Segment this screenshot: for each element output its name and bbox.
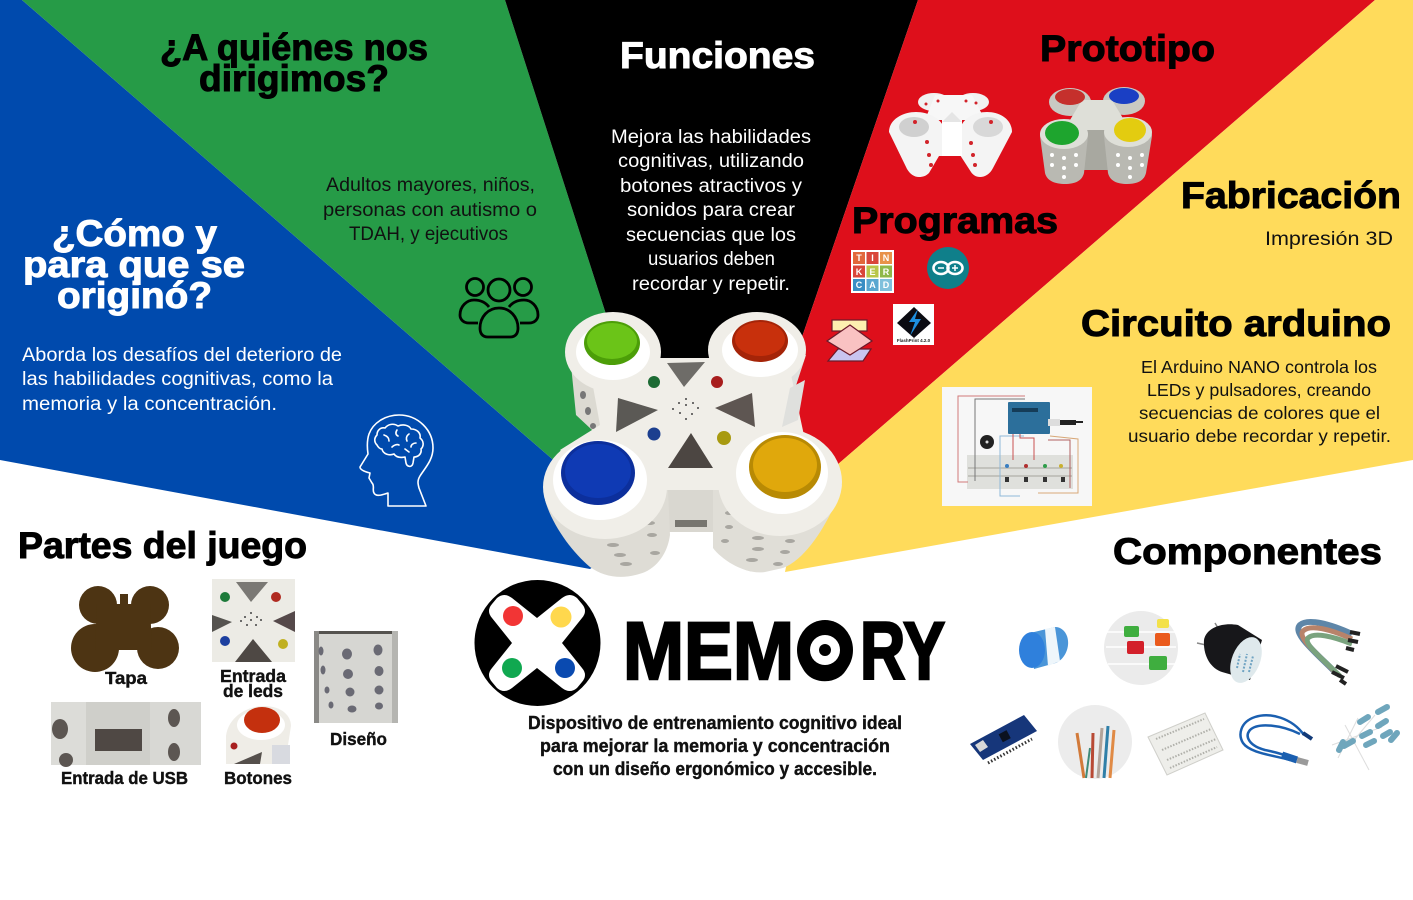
logo: memory wordmark bbox=[623, 606, 945, 697]
text: tagline: con un diseño ergonómico y accesible. bbox=[553, 759, 877, 779]
image: design detail bbox=[314, 631, 398, 723]
text: audience bbox=[323, 175, 537, 245]
heading: componentes: Componentes bbox=[1113, 531, 1382, 572]
caption: entrada de leds bbox=[220, 666, 286, 701]
text: functions: secuencias que los bbox=[626, 225, 796, 246]
text: tagline: Dispositivo de entrenamiento cognitivo ideal bbox=[528, 713, 902, 733]
text: functions: botones atractivos y bbox=[620, 176, 803, 197]
logo: memory symbol bbox=[474, 580, 600, 706]
image: push button bbox=[1019, 627, 1068, 669]
icon: flowchart layers bbox=[827, 320, 872, 361]
text: tagline: para mejorar la memoria y concentración bbox=[540, 736, 890, 756]
heading: a quienes nos dirigimos: dirigimos? bbox=[199, 58, 389, 99]
text: circuit description: El Arduino NANO controla los bbox=[1141, 357, 1377, 377]
panel: blue wedge bbox=[0, 0, 640, 569]
icon: tinkercad logo: D bbox=[883, 280, 890, 290]
yellow button bbox=[749, 435, 821, 499]
caption: botones: Botones bbox=[224, 768, 292, 788]
green button bbox=[584, 321, 640, 365]
heading: como y para que se origino: para que se bbox=[23, 244, 245, 285]
icon: tinkercad logo: E bbox=[869, 267, 876, 277]
logo: memory wordmark: MEM bbox=[623, 606, 794, 697]
image: buzzer bbox=[1197, 623, 1268, 687]
image: memory game device bbox=[543, 312, 842, 577]
icon: tinkercad logo: T bbox=[856, 253, 862, 263]
heading: como y para que se origino: ¿Cómo y bbox=[52, 213, 217, 254]
image: cables bbox=[1058, 705, 1132, 779]
image: arduino nano bbox=[970, 715, 1037, 763]
icon: tinkercad logo: I bbox=[871, 253, 874, 263]
heading: circuito arduino: Circuito arduino bbox=[1081, 303, 1391, 344]
heading: fabricacion: Fabricación bbox=[1181, 175, 1401, 216]
text: functions: cognitivas, utilizando bbox=[618, 151, 804, 172]
button collars bbox=[576, 324, 650, 380]
icon: flashprint logo bbox=[893, 304, 934, 345]
heading: partes del juego: Partes del juego bbox=[18, 525, 307, 566]
top right cylinder bbox=[743, 355, 806, 430]
top left cylinder bbox=[570, 355, 636, 443]
heading: prototipo: Prototipo bbox=[1040, 28, 1215, 69]
icon: arduino logo bbox=[927, 247, 969, 289]
image: led entry bbox=[212, 579, 295, 662]
image: lid bbox=[71, 586, 179, 672]
caption: entrada de usb: Entrada de USB bbox=[61, 768, 188, 788]
text: audience: Adultos mayores, niños, bbox=[326, 175, 535, 196]
image: arduino circuit diagram bbox=[942, 387, 1092, 506]
speaker holes bbox=[672, 398, 699, 420]
icon: tinkercad logo: R bbox=[883, 267, 890, 277]
image: coloured 3D model bbox=[1040, 87, 1152, 184]
icon: head with brain bbox=[360, 415, 433, 506]
panel: game parts bbox=[51, 579, 398, 788]
text: audience: personas con autismo o bbox=[323, 200, 537, 221]
blue button bbox=[561, 441, 635, 505]
image: button detail bbox=[226, 706, 291, 764]
text: tagline bbox=[528, 713, 902, 779]
text: functions: sonidos para crear bbox=[627, 200, 796, 221]
front block bbox=[664, 470, 720, 532]
text: circuit description bbox=[1128, 357, 1391, 446]
caption: tapa: Tapa bbox=[105, 668, 147, 688]
left lower cylinder bbox=[545, 490, 670, 577]
icon: tinkercad logo bbox=[851, 250, 894, 293]
text: origin bbox=[22, 345, 342, 415]
triangle openings bbox=[667, 362, 705, 387]
text: circuit description: LEDs y pulsadores, creando bbox=[1147, 380, 1371, 400]
heading: a quienes nos dirigimos: ¿A quiénes nos bbox=[160, 27, 428, 68]
panel: components bbox=[970, 611, 1397, 779]
icon: group of people bbox=[460, 278, 538, 337]
heading: programas: Programas bbox=[852, 200, 1058, 241]
icon: tinkercad logo: K bbox=[856, 267, 863, 277]
icon: tinkercad logo: A bbox=[869, 280, 876, 290]
caption: entrada de leds: de leds bbox=[223, 681, 283, 701]
image: resistors bbox=[1332, 707, 1397, 770]
text: circuit description: usuario debe recordar y repetir. bbox=[1128, 426, 1391, 446]
icon: flashprint logo: FlashPrint 4.2.0 bbox=[897, 338, 931, 343]
text: functions: recordar y repetir. bbox=[632, 274, 790, 295]
icon: tinkercad logo: C bbox=[856, 280, 863, 290]
text: functions: usuarios deben bbox=[648, 249, 775, 270]
image: usb cable bbox=[1241, 715, 1312, 763]
heading: como y para que se origino bbox=[23, 213, 245, 316]
text: functions bbox=[611, 127, 811, 295]
panel: black wedge bbox=[505, 0, 918, 430]
caption: entrada de leds: Entrada bbox=[220, 666, 286, 686]
top plate bbox=[560, 358, 830, 490]
image: LEDs bbox=[1104, 611, 1178, 685]
right lower cylinder bbox=[713, 485, 842, 572]
text: origin: Aborda los desafíos del deterioro de bbox=[22, 345, 342, 366]
image: usb entry bbox=[51, 702, 201, 767]
text: 3D printing: Impresión 3D bbox=[1265, 229, 1393, 250]
text: circuit description: secuencias de colores que el bbox=[1139, 403, 1380, 423]
heading: funciones: Funciones bbox=[620, 35, 815, 76]
heading: como y para que se origino: originó? bbox=[57, 275, 212, 316]
image: breadboard bbox=[1148, 713, 1223, 775]
caption: diseno: Diseño bbox=[330, 729, 387, 749]
panel: yellow wedge bbox=[785, 0, 1413, 572]
LEDs bbox=[648, 376, 660, 388]
text: functions: Mejora las habilidades bbox=[611, 127, 811, 148]
icon: tinkercad logo: N bbox=[883, 253, 889, 263]
logo: memory wordmark: RY bbox=[860, 606, 945, 697]
panel: green wedge bbox=[22, 0, 640, 535]
logo: memory wordmark: O bbox=[797, 606, 853, 697]
red button bbox=[732, 320, 788, 362]
text: origin: las habilidades cognitivas, como la bbox=[22, 369, 333, 390]
heading: a quienes nos dirigimos bbox=[160, 27, 428, 99]
panel: red wedge bbox=[770, 0, 1375, 497]
image: white 3D model bbox=[889, 93, 1012, 177]
image: jumper wires bbox=[1298, 622, 1360, 684]
text: origin: memoria y la concentración. bbox=[22, 394, 277, 415]
text: audience: TDAH, y ejecutivos bbox=[349, 224, 508, 245]
